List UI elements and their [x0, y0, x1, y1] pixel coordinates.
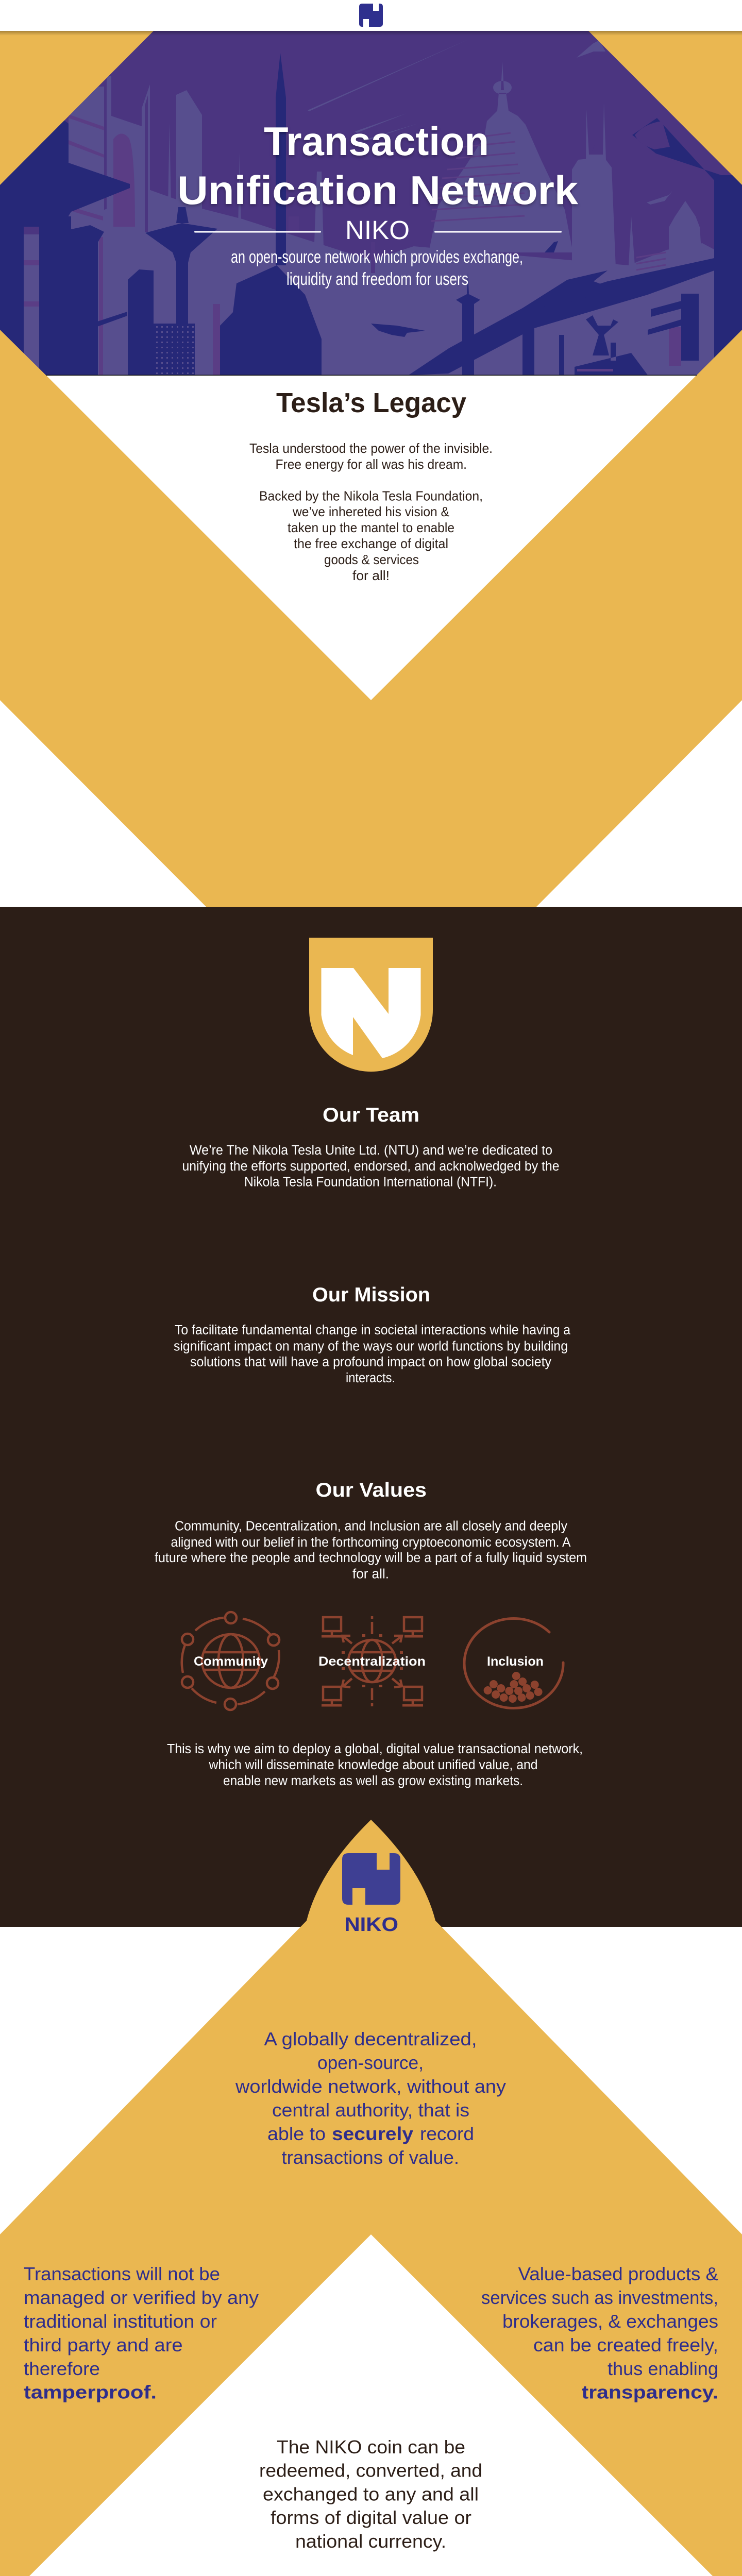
- text: transparency callout: thus enabling: [608, 2358, 718, 2379]
- text: tamperproof callout: traditional institution or: [24, 2311, 217, 2332]
- text: transparency callout: can be created freely,: [533, 2334, 718, 2355]
- heading: Our Mission: Our Mission: [312, 1284, 430, 1306]
- icon: header logo: [359, 4, 383, 27]
- magenta accents: [24, 114, 135, 375]
- icon: community globe: [182, 1612, 279, 1710]
- icon: NIKO logo: [342, 1853, 400, 1905]
- header white bar: [0, 0, 742, 31]
- header shadow: [0, 31, 742, 36]
- hero bottom edge line: [46, 375, 697, 376]
- text: team paragraph: Nikola Tesla Foundation International (NTFI).: [244, 1175, 497, 1189]
- text: network description: able to: [267, 2123, 326, 2144]
- text: transparency callout: transparency.: [582, 2381, 718, 2403]
- text: deployment paragraph: [167, 1742, 583, 1788]
- text: values paragraph: Community, Decentralization, and Inclusion are all closely and deeply: [175, 1519, 567, 1533]
- value labels: Decentralization: [318, 1654, 426, 1669]
- text: network description: worldwide network, without any: [235, 2076, 506, 2097]
- hero subtitle: [231, 247, 523, 289]
- text: network description: open-source,: [317, 2052, 424, 2073]
- NIKO label: NIKO: [344, 1914, 398, 1936]
- hero subtitle: an open-source network which provides exchange,: [231, 247, 523, 267]
- value labels: [194, 1654, 544, 1669]
- text: deployment paragraph: which will disseminate knowledge about unified value, and: [209, 1758, 537, 1772]
- text: team paragraph: unifying the efforts supported, endorsed, and acknolwedged by the: [182, 1159, 560, 1174]
- text: Tesla paragraph: taken up the mantel to enable: [288, 520, 454, 535]
- text: NIKO coin: The NIKO coin can be: [277, 2436, 465, 2458]
- text: Tesla paragraph: goods & services: [324, 552, 419, 567]
- text: tamperproof callout: tamperproof.: [24, 2381, 157, 2403]
- text: tamperproof callout: therefore: [24, 2358, 100, 2379]
- text: values paragraph: [155, 1519, 587, 1582]
- text: tamperproof callout: managed or verified by any: [24, 2287, 259, 2308]
- heading: Our Values: Our Values: [315, 1479, 427, 1501]
- text: tamperproof callout: [24, 2263, 259, 2403]
- icon: N shield: [309, 938, 433, 1072]
- value labels: Inclusion: [487, 1654, 544, 1669]
- hero title: Transaction: [264, 118, 489, 164]
- text: transparency callout: services such as investments,: [481, 2287, 718, 2308]
- text: Tesla paragraph: the free exchange of digital: [294, 536, 448, 551]
- heading: Tesla's Legacy: Tesla’s Legacy: [276, 387, 466, 418]
- hero title: [177, 118, 579, 213]
- hero NIKO label with rules: [194, 215, 562, 245]
- panel: dark team section: [0, 907, 742, 1927]
- text: NIKO coin: redeemed, converted, and: [259, 2460, 482, 2481]
- text: Tesla paragraph: for all!: [352, 568, 390, 583]
- hero title: Unification Network: [177, 167, 579, 213]
- text: network description: securely: [332, 2123, 413, 2144]
- text: network description: record: [420, 2123, 474, 2144]
- text: NIKO coin: national currency.: [295, 2531, 446, 2552]
- text: Tesla paragraph: we’ve inhereted his vision &: [292, 504, 449, 519]
- text: mission paragraph: To facilitate fundamental change in societal interactions while having a: [175, 1323, 571, 1337]
- text: network description: central authority, that is: [272, 2099, 469, 2121]
- gold rocket shape: [0, 1820, 742, 2576]
- text: mission paragraph: [174, 1323, 571, 1385]
- text: network description: A globally decentralized,: [264, 2028, 477, 2049]
- text: values paragraph: for all.: [352, 1567, 389, 1582]
- text: mission paragraph: interacts.: [346, 1371, 395, 1385]
- icon: decentralization network: [322, 1616, 423, 1706]
- text: transparency callout: Value-based products &: [518, 2263, 718, 2284]
- text: Tesla paragraph: Free energy for all was his dream.: [275, 456, 467, 472]
- text: deployment paragraph: This is why we aim to deploy a global, digital value transactional network,: [167, 1742, 583, 1756]
- text: transparency callout: [481, 2263, 718, 2403]
- text: network description: transactions of value.: [281, 2147, 459, 2168]
- heading: Our Team: Our Team: [323, 1104, 419, 1126]
- icon: inclusion circle with balls: [464, 1619, 563, 1708]
- text: mission paragraph: significant impact on many of the ways our world functions by building: [174, 1340, 568, 1354]
- right structures under the bridge: [669, 327, 681, 366]
- text: deployment paragraph: enable new markets as well as grow existing markets.: [223, 1774, 523, 1788]
- text: NIKO coin: [259, 2436, 482, 2552]
- text: network description: [235, 2028, 506, 2168]
- text: NIKO coin: exchanged to any and all: [263, 2483, 479, 2505]
- text: values paragraph: aligned with our belief in the forthcoming cryptoeconomic ecosystem. A: [171, 1535, 571, 1550]
- text: mission paragraph: solutions that will have a profound impact on how global society: [190, 1355, 551, 1369]
- text: tamperproof callout: third party and are: [24, 2334, 182, 2355]
- light buildings: [24, 76, 742, 375]
- gold chevron background: [0, 31, 742, 907]
- text: NIKO coin: forms of digital value or: [271, 2507, 471, 2528]
- dark foreground, right: [409, 257, 721, 375]
- text: Tesla paragraph: Tesla understood the power of the invisible.: [249, 440, 493, 456]
- text: team paragraph: We’re The Nikola Tesla Unite Ltd. (NTU) and we’re dedicated to: [190, 1143, 552, 1158]
- text: tamperproof callout: Transactions will not be: [24, 2263, 220, 2284]
- text: Tesla paragraph: Backed by the Nikola Tesla Foundation,: [259, 488, 483, 504]
- hero city illustration: [0, 31, 742, 375]
- value labels: Community: [194, 1654, 268, 1669]
- text: Tesla paragraph: [249, 440, 493, 583]
- text: values paragraph: future where the people and technology will be a part of a fully liquid system: [155, 1551, 587, 1565]
- hero subtitle: liquidity and freedom for users: [286, 269, 468, 289]
- text: transparency callout: brokerages, & exchanges: [502, 2311, 718, 2332]
- text: team paragraph: [182, 1143, 560, 1189]
- dark foreground, left: [0, 53, 322, 375]
- hero NIKO label with rules: NIKO: [345, 215, 410, 245]
